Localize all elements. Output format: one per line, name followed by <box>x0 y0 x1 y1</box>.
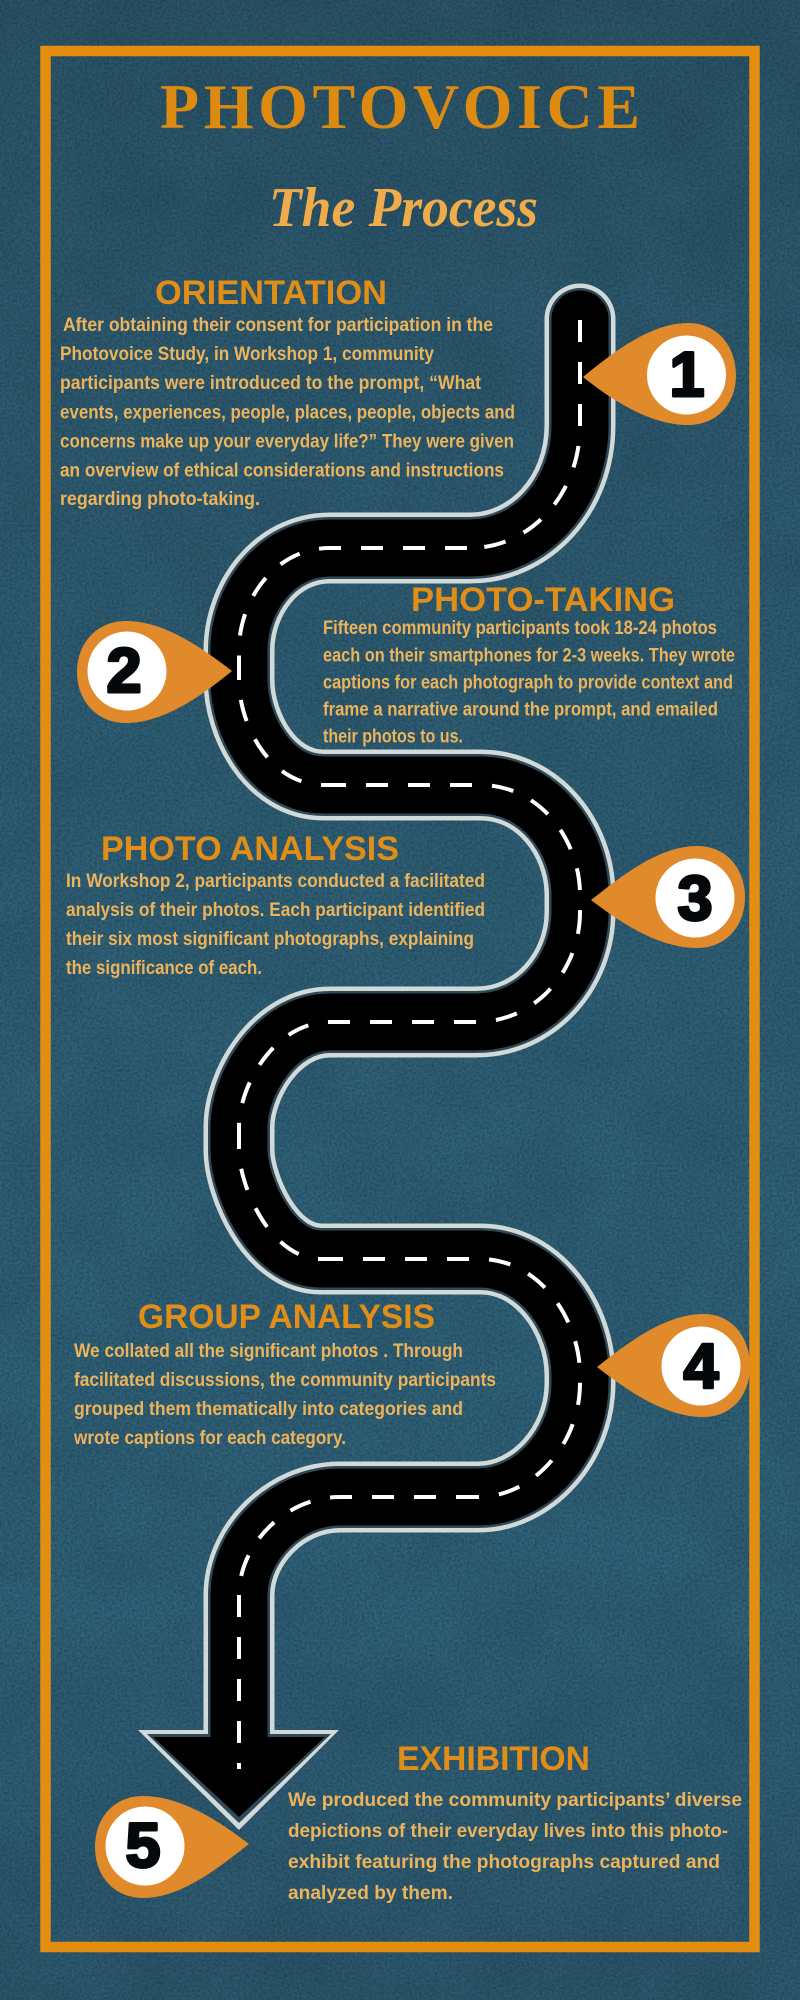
text block: photo analysis: In Workshop 2, participants conducted a facilitated <box>66 870 485 892</box>
heading: photo analysis: PHOTO ANALYSIS <box>101 830 399 868</box>
icon: marker 2 <box>77 621 232 723</box>
icon: marker 2: 2 <box>106 636 142 706</box>
icon: marker 1: 1 <box>669 340 705 410</box>
icon: marker 5: 5 <box>125 1811 161 1881</box>
text block: orientation: concerns make up your everyday life?” They were given <box>60 430 514 452</box>
panel: photo analysis <box>66 830 485 979</box>
text block: exhibition: depictions of their everyday lives into this photo- <box>288 1820 728 1842</box>
icon: marker 5 <box>95 1796 249 1898</box>
text block: photo-taking: their photos to us. <box>323 726 463 748</box>
panel: group analysis <box>73 1298 496 1449</box>
text block: photo analysis: their six most significant photographs, explaining <box>66 928 474 950</box>
text block: group analysis <box>73 1340 496 1449</box>
text block: photo-taking: frame a narrative around the prompt, and emailed <box>323 698 718 720</box>
text block: orientation: participants were introduced to the prompt, “What <box>60 372 481 394</box>
text block: orientation: events, experiences, people, places, people, objects and <box>60 402 515 424</box>
text block: group analysis: We collated all the significant photos . Through <box>74 1340 463 1362</box>
text block: group analysis: grouped them thematically into categories and <box>74 1398 463 1420</box>
winding road with arrow <box>138 319 580 1830</box>
text block: exhibition: analyzed by them. <box>288 1882 453 1904</box>
text block: photo analysis: analysis of their photos. Each participant identified <box>66 899 485 921</box>
title: PHOTOVOICE <box>160 71 640 142</box>
text block: photo analysis: the significance of each. <box>66 957 262 979</box>
heading: group analysis: GROUP ANALYSIS <box>138 1298 435 1336</box>
icon: marker 3 <box>591 846 745 948</box>
text block: orientation: regarding photo-taking. <box>60 488 260 510</box>
icon: marker 3: 3 <box>677 864 713 934</box>
text block: exhibition: We produced the community participants’ diverse <box>288 1789 742 1811</box>
panel: exhibition <box>288 1740 742 1904</box>
text block: photo-taking: captions for each photograph to provide context and <box>323 672 733 694</box>
icon: marker 4: 4 <box>683 1332 719 1402</box>
text block: group analysis: facilitated discussions, the community participants <box>74 1369 496 1391</box>
icon: marker 1 <box>583 323 736 425</box>
text block: orientation: an overview of ethical considerations and instructions <box>60 460 504 482</box>
panel: photo-taking <box>323 581 735 748</box>
text block: photo analysis <box>66 870 485 979</box>
heading: exhibition: EXHIBITION <box>397 1740 590 1778</box>
heading: orientation: ORIENTATION <box>155 274 387 312</box>
text block: group analysis: wrote captions for each category. <box>73 1427 346 1449</box>
text block: exhibition <box>288 1789 742 1904</box>
text block: orientation <box>60 314 515 510</box>
text block: exhibition: exhibit featuring the photographs captured and <box>288 1851 720 1873</box>
text block: photo-taking: Fifteen community participants took 18-24 photos <box>323 617 717 639</box>
text block: photo-taking <box>323 617 735 748</box>
text block: orientation: Photovoice Study, in Workshop 1, community <box>60 343 434 365</box>
icon: marker 4 <box>597 1314 750 1417</box>
subtitle: The Process <box>269 177 538 239</box>
panel: orientation <box>60 274 515 510</box>
text block: orientation: After obtaining their consent for participation in the <box>63 314 493 336</box>
heading: photo-taking: PHOTO-TAKING <box>411 581 675 619</box>
